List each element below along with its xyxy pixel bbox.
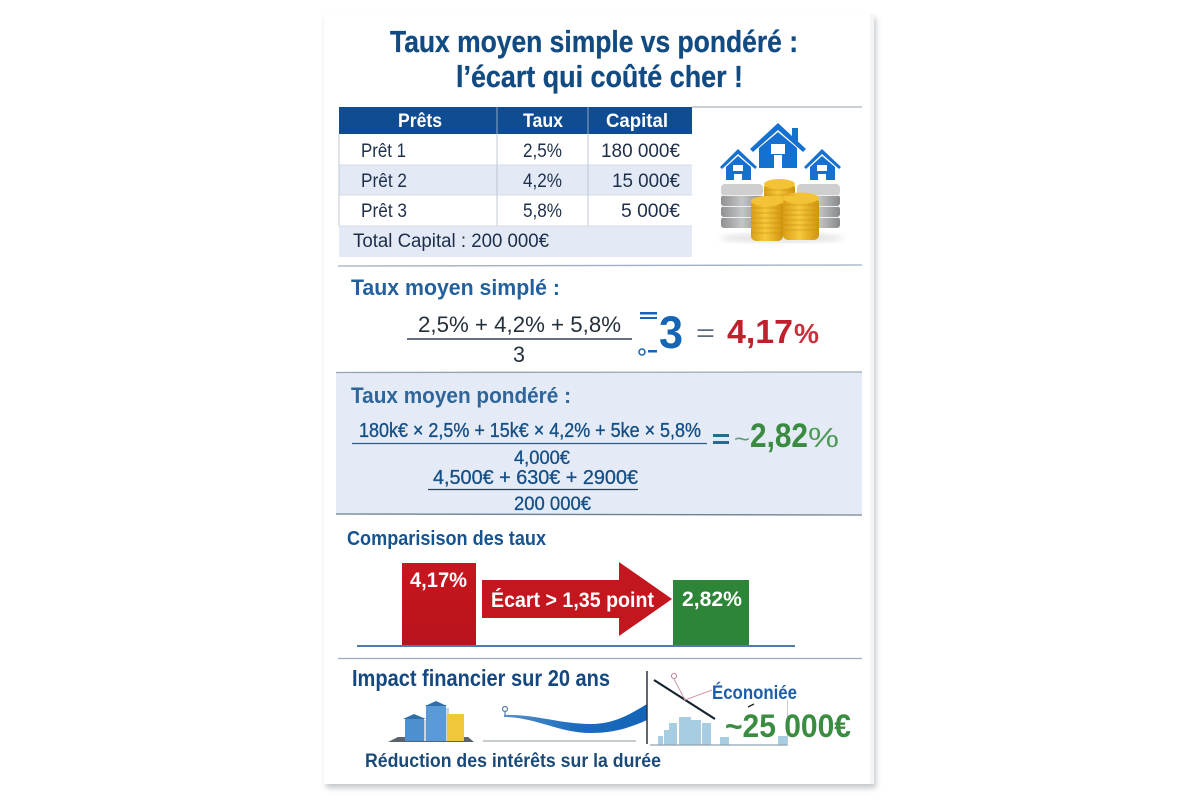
formula: simple average: 2,5% + 4,2% + 5,8%: [418, 312, 621, 337]
formula: weighted average: 180k€ × 2,5% + 15k€ × 4,2% + 5ke × 5,8%: [359, 420, 701, 442]
table rows: 15 000€: [612, 171, 680, 192]
chart: interest curve: [483, 704, 647, 741]
card background: [324, 14, 876, 788]
table rows: [361, 141, 680, 222]
table header labels: Prêts: [398, 111, 442, 132]
bar: weighted rate: 2,82%: [682, 588, 742, 611]
result: 2,82%: [713, 417, 839, 455]
result: 4,17%: =: [696, 320, 715, 347]
icon: houses: [720, 123, 841, 180]
bar: simple rate: [402, 563, 476, 646]
arrow: gap: [482, 562, 672, 636]
title: Taux moyen simple vs pondéré :: [390, 24, 798, 59]
heading: simple average: Taux moyen simplé :: [351, 275, 560, 300]
result: 4,17%: %: [794, 318, 819, 349]
table header labels: Capital: [606, 111, 668, 132]
result: 2,82%: %: [808, 422, 839, 453]
table header labels: Taux: [523, 111, 563, 132]
total capital: Total Capital : 200 000€: [353, 231, 549, 252]
icon: houses with servers and coins: [720, 123, 844, 243]
table rows: 2,5%: [523, 141, 562, 162]
icon: server stacks: [721, 184, 840, 228]
caption: interest reduction: Réduction des intérêts sur la durée: [365, 751, 661, 772]
formula: weighted average: 4,000€: [514, 448, 570, 469]
bar: simple rate: 4,17%: [410, 569, 467, 592]
result: 2,82%: ~: [734, 426, 750, 453]
table rows: 5 000€: [621, 201, 680, 222]
table rows: 5,8%: [523, 201, 562, 222]
heading: impact: Impact financier sur 20 ans: [352, 665, 610, 691]
icon: buildings: [388, 701, 474, 742]
panel: weighted average: [336, 372, 862, 515]
heading: comparison: Comparisison des taux: [347, 528, 546, 550]
table rows: 4,2%: [523, 171, 562, 192]
result: 4,17%: [696, 313, 819, 350]
panel: financial impact: [352, 665, 851, 772]
title: [390, 24, 798, 94]
table rows: Prêt 3: [361, 201, 407, 222]
result: 2,82%: 2,82: [750, 417, 808, 455]
table rows: Prêt 1: [361, 141, 406, 162]
value: savings amount: ~25 000€: [725, 708, 851, 744]
table header labels: [398, 111, 668, 132]
label: savings: Écononiée: [712, 682, 797, 704]
panel: rate comparison: [347, 528, 795, 646]
formula: weighted average: 4,500€ + 630€ + 2900€: [433, 467, 638, 489]
panel: loans table: [339, 107, 692, 257]
icon: coin stacks: [751, 179, 819, 241]
bar: weighted rate: [673, 580, 749, 646]
glyph: large blue three: 3: [659, 307, 683, 358]
table rows: Prêt 2: [361, 171, 407, 192]
arrow: gap: Écart > 1,35 point: [491, 589, 654, 612]
title: l’écart qui coûté cher !: [456, 59, 743, 94]
formula: weighted average: 200 000€: [514, 494, 591, 515]
formula: simple average: [407, 312, 632, 367]
glyph: large blue three: [639, 307, 683, 358]
panel: simple average: [351, 275, 819, 367]
formula: simple average: 3: [513, 342, 525, 367]
result: 4,17%: 4,17: [727, 313, 793, 350]
heading: weighted average: Taux moyen pondéré :: [351, 383, 571, 408]
formula: weighted average: [352, 420, 707, 515]
chart: savings bars: [647, 671, 788, 745]
table rows: 180 000€: [601, 141, 680, 162]
